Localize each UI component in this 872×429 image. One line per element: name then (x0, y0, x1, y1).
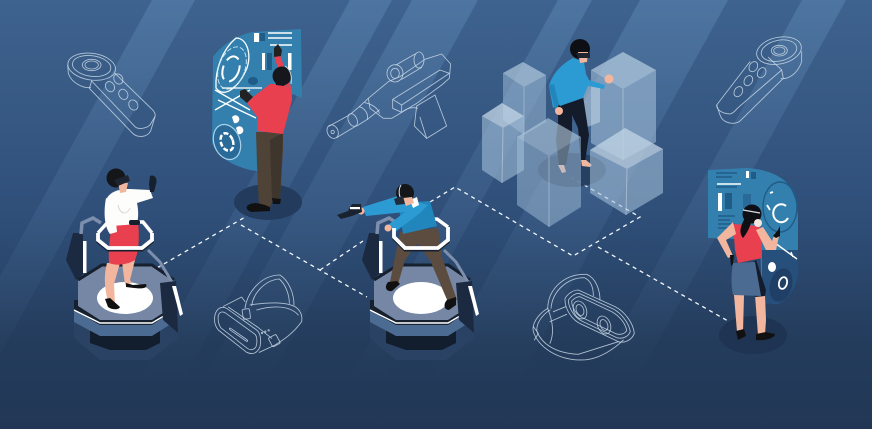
dashed connector lines (157, 178, 735, 325)
head (570, 39, 590, 59)
translucent box center front (517, 118, 581, 227)
translucent box small middle (580, 84, 600, 130)
sweater (247, 84, 292, 134)
hands (604, 74, 614, 84)
translucent box front right (590, 128, 663, 215)
outline icon: blaster gun (325, 52, 451, 140)
holographic panel: behind man (209, 29, 302, 172)
platform center (362, 218, 479, 360)
skirt (109, 222, 139, 265)
translucent box left (482, 103, 524, 183)
raised arm (274, 55, 292, 90)
outline icon: controller right (717, 33, 804, 123)
dark skirt side (752, 260, 766, 297)
hand (357, 207, 365, 215)
shadow (538, 153, 606, 187)
shoes (247, 203, 270, 212)
ring front (98, 235, 152, 250)
skirt (732, 262, 761, 296)
translucent box back left (503, 62, 546, 135)
head (396, 184, 414, 202)
feet (581, 160, 592, 167)
hands (274, 44, 282, 57)
outline icon: VR headset right (533, 274, 634, 360)
trousers (390, 228, 457, 302)
sweater (398, 201, 437, 234)
ring back (98, 222, 152, 233)
head (272, 66, 292, 86)
legs (734, 295, 744, 332)
shoes (736, 329, 746, 340)
holographic panel: behind woman right (708, 168, 798, 304)
translucent box back right (591, 52, 656, 160)
ring front (394, 229, 448, 250)
head (106, 168, 126, 188)
ring back (394, 219, 448, 228)
shadow (719, 316, 787, 354)
platform left (66, 218, 183, 360)
man in blue sweater on platform (337, 184, 457, 310)
controllers (149, 175, 157, 192)
shadow (234, 184, 302, 220)
gun (337, 204, 362, 219)
woman in white top on platform (98, 168, 157, 309)
trousers (556, 96, 589, 165)
outline icon: controller left (66, 50, 155, 136)
sweater (549, 58, 605, 108)
head (742, 204, 762, 224)
red top (733, 224, 762, 263)
shoes (386, 281, 400, 291)
trousers (256, 132, 283, 208)
legs (105, 263, 120, 305)
woman among boxes (538, 39, 614, 187)
arms (717, 222, 736, 258)
woman in red top (717, 204, 787, 354)
shoes (105, 298, 120, 309)
outline icon: VR headset left (214, 275, 302, 354)
torso (106, 189, 153, 226)
man in red sweater (234, 44, 302, 220)
